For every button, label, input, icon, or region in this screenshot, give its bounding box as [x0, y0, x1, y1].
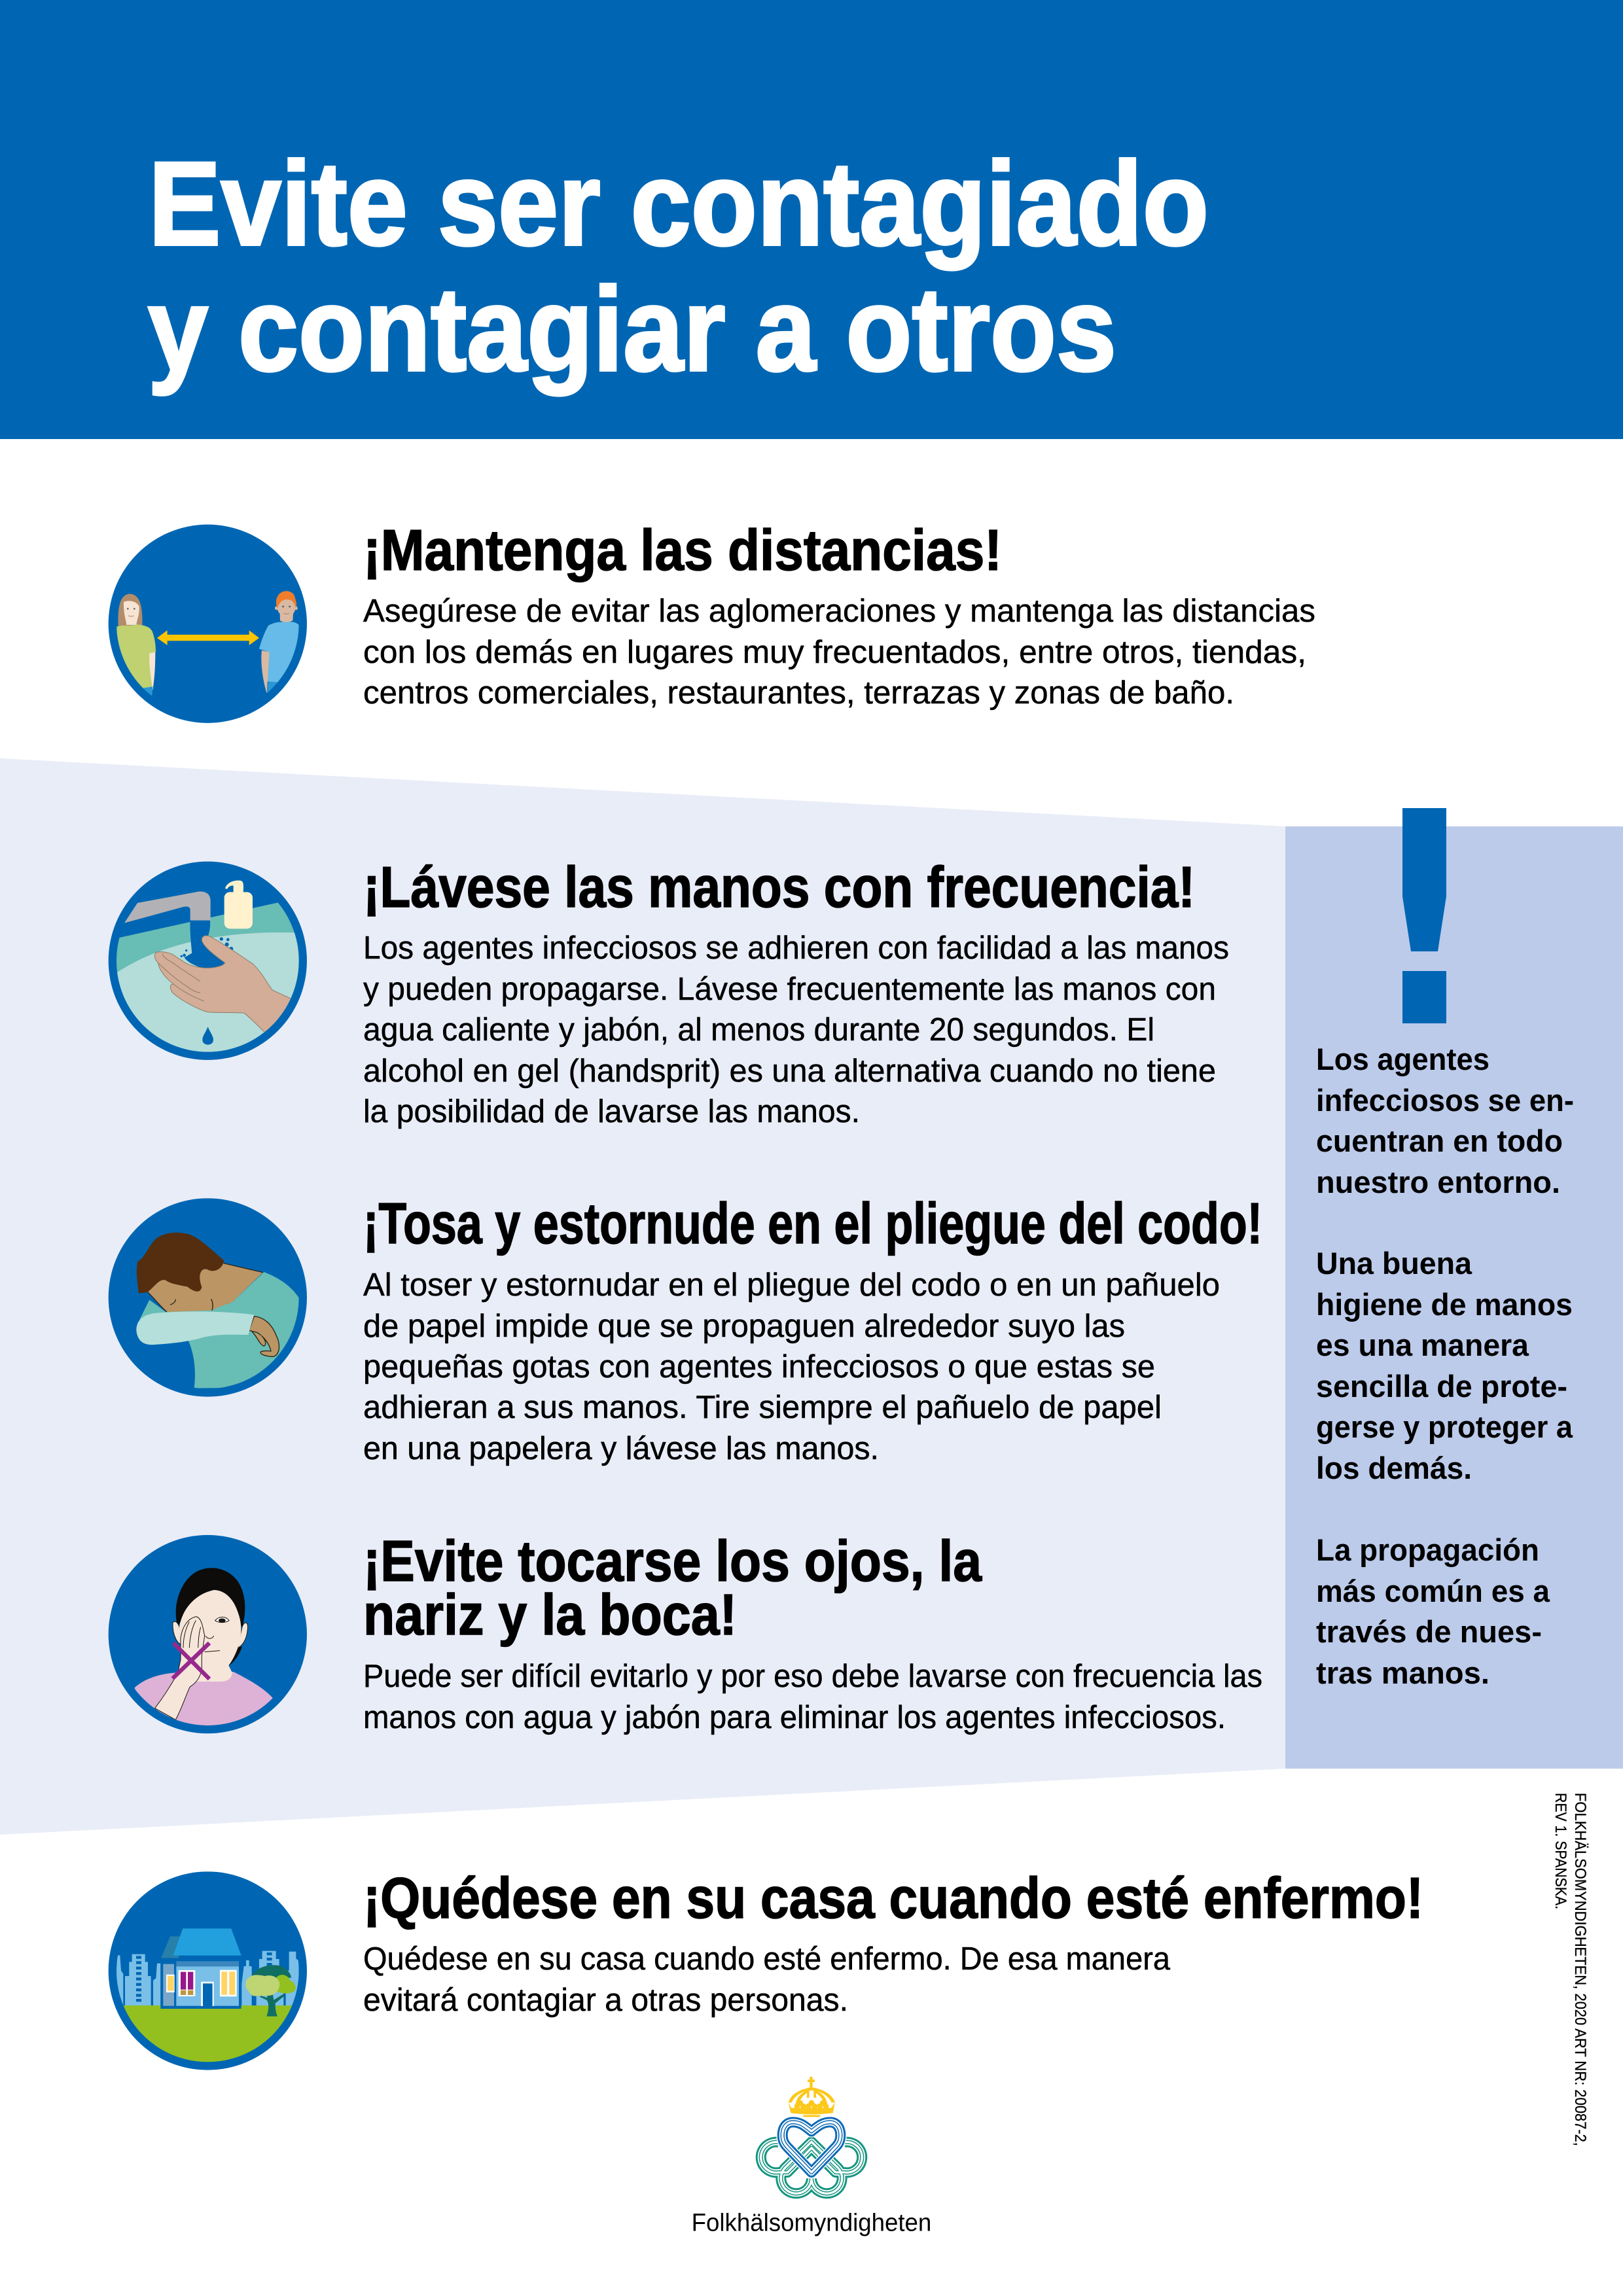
- icon: heart: [783, 2122, 840, 2172]
- sidebar text: second paragraph: es una manera: [1316, 1328, 1529, 1362]
- heading: wash hands: ¡Lávese las manos con frecuencia!: [363, 855, 1195, 919]
- heading: avoid touching: nariz y la boca!: [363, 1582, 737, 1647]
- text: keep distance: Asegúrese de evitar las aglomeraciones y mantenga las distancias: [363, 593, 1315, 629]
- text: wash hands: la posibilidad de lavarse las manos.: [363, 1094, 860, 1129]
- text: wash hands: [363, 930, 1229, 1129]
- icon: house and city: [109, 1871, 307, 2071]
- sidebar text: first paragraph: cuentran en todo: [1316, 1123, 1563, 1158]
- text: avoid touching: manos con agua y jabón para eliminar los agentes infecciosos.: [363, 1700, 1226, 1735]
- sidebar text: second paragraph: higiene de manos: [1316, 1287, 1573, 1322]
- text: cough: adhieran a sus manos. Tire siempre el pañuelo de papel: [363, 1390, 1162, 1425]
- heading: stay home: ¡Quédese en su casa cuando esté enfermo!: [363, 1865, 1423, 1930]
- text: wash hands: agua caliente y jabón, al menos durante 20 segundos. El: [363, 1012, 1154, 1048]
- text: stay home: evitará contagiar a otras personas.: [363, 1983, 848, 2018]
- text: wash hands: alcohol en gel (handsprit) es una alternativa cuando no tiene: [363, 1053, 1216, 1089]
- logo wordmark: Folkhälsomyndigheten: [692, 2209, 931, 2236]
- title: Evite ser contagiado: [149, 137, 1209, 270]
- text: avoid touching: [363, 1659, 1262, 1735]
- vertical print reference: REV 1. SPANSKA.: [1552, 1793, 1569, 1909]
- sidebar text: second paragraph: gerse y proteger a: [1316, 1409, 1573, 1444]
- text: cough: [363, 1267, 1220, 1466]
- text: stay home: Quédese en su casa cuando esté enfermo. De esa manera: [363, 1941, 1171, 1977]
- title: [148, 137, 1209, 396]
- title: y contagiar a otros: [148, 262, 1116, 396]
- text: keep distance: centros comerciales, restaurantes, terrazas y zonas de baño.: [363, 675, 1234, 711]
- sidebar text: second paragraph: [1316, 1246, 1573, 1485]
- icon: exclamation mark: [1402, 808, 1446, 1023]
- text: wash hands: y pueden propagarse. Lávese frecuentemente las manos con: [363, 972, 1216, 1007]
- icon: two people keeping distance: [109, 525, 307, 723]
- sidebar text: second paragraph: sencilla de prote-: [1316, 1369, 1567, 1404]
- text: wash hands: Los agentes infecciosos se adhieren con facilidad a las manos: [363, 930, 1229, 966]
- header banner: [0, 0, 1623, 439]
- sidebar text: first paragraph: nuestro entorno.: [1316, 1165, 1560, 1199]
- sidebar text: second paragraph: los demás.: [1316, 1451, 1472, 1485]
- text: cough: en una papelera y lávese las manos.: [363, 1431, 879, 1466]
- heading: avoid touching: [363, 1528, 982, 1647]
- text: cough: Al toser y estornudar en el pliegue del codo o en un pañuelo: [363, 1267, 1220, 1303]
- icon: washing hands: [109, 862, 307, 1065]
- icon: clover knot: [761, 2142, 862, 2193]
- heading: keep distance: ¡Mantenga las distancias!: [363, 518, 1002, 582]
- text: keep distance: [363, 593, 1315, 711]
- sidebar text: first paragraph: infecciosos se en-: [1316, 1083, 1574, 1118]
- logo: Folkhälsomyndigheten: [692, 2077, 931, 2236]
- tree: [245, 1965, 296, 2017]
- vertical print reference: [1552, 1793, 1589, 2146]
- icon: avoid touching face: [109, 1535, 307, 1734]
- sidebar text: second paragraph: Una buena: [1316, 1246, 1472, 1280]
- text: cough: pequeñas gotas con agentes infecciosos o que estas se: [363, 1349, 1155, 1385]
- sidebar text: third paragraph: [1316, 1532, 1550, 1690]
- text: cough: de papel impide que se propaguen alrededor suyo las: [363, 1309, 1125, 1344]
- text: avoid touching: Puede ser difícil evitarlo y por eso debe lavarse con frecuencia las: [363, 1659, 1262, 1694]
- sidebar text: first paragraph: [1316, 1042, 1574, 1199]
- sidebar text: first paragraph: Los agentes: [1316, 1042, 1489, 1076]
- sidebar text: third paragraph: tras manos.: [1316, 1655, 1489, 1690]
- text: stay home: [363, 1941, 1171, 2018]
- icon: coughing into elbow: [109, 1198, 307, 1397]
- text: keep distance: con los demás en lugares muy frecuentados, entre otros, tiendas,: [363, 635, 1306, 670]
- sidebar text: third paragraph: través de nues-: [1316, 1614, 1542, 1649]
- heading: cough: ¡Tosa y estornude en el pliegue del codo!: [363, 1191, 1262, 1256]
- panel: sidebar: [1285, 808, 1623, 1769]
- heading: avoid touching: ¡Evite tocarse los ojos, la: [363, 1528, 982, 1593]
- light background band: [0, 758, 1285, 1835]
- sidebar text: third paragraph: La propagación: [1316, 1532, 1539, 1567]
- sidebar text: third paragraph: más común es a: [1316, 1574, 1550, 1608]
- icon: crown: [789, 2077, 835, 2117]
- vertical print reference: FOLKHÄLSOMYNDIGHETEN, 2020 ART NR: 20087-2,: [1571, 1793, 1589, 2146]
